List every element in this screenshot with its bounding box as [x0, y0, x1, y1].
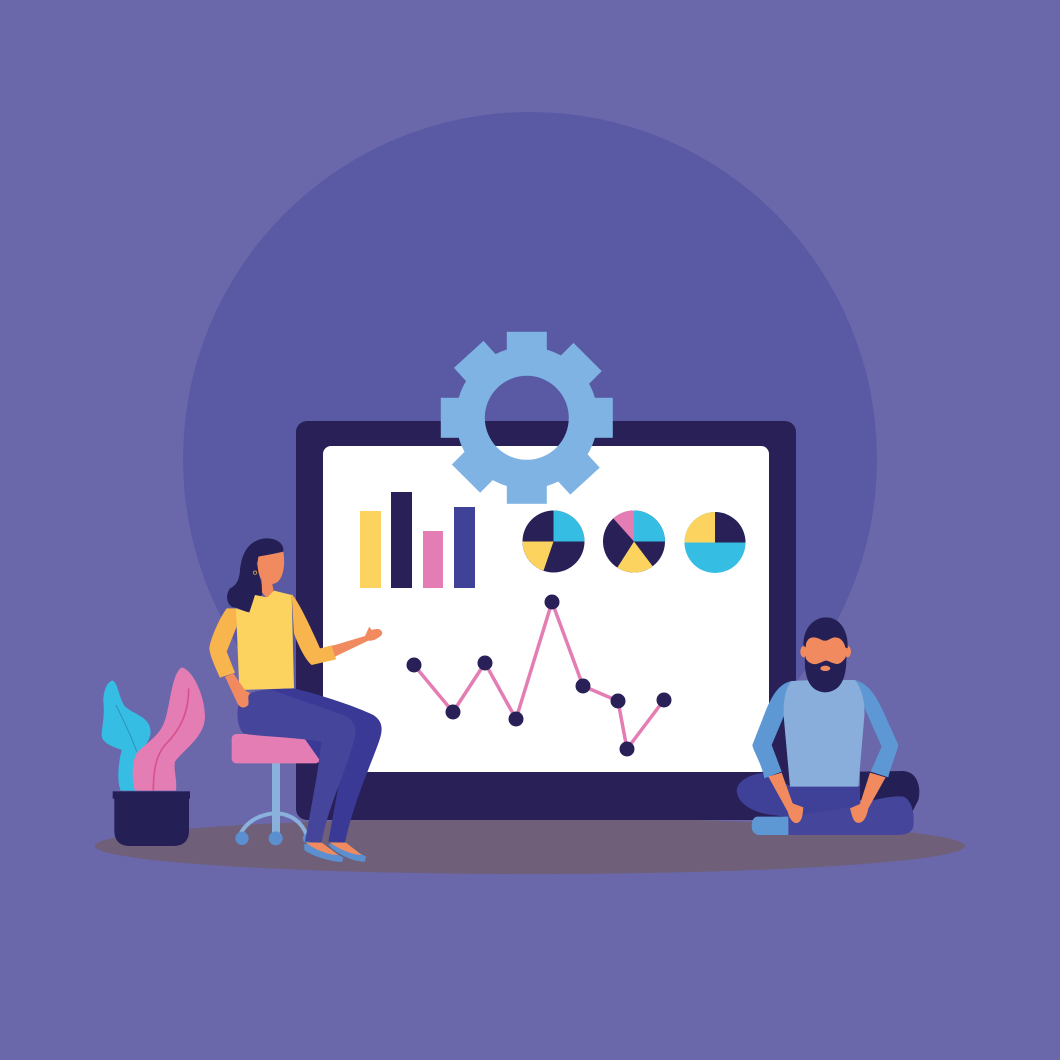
hair [803, 617, 848, 648]
far shoe [328, 843, 366, 862]
left ear [800, 646, 807, 657]
woman on stool [209, 538, 382, 862]
pie chart 3 [684, 512, 746, 573]
near shoe [304, 843, 343, 862]
beard [805, 657, 846, 692]
ground shadow [95, 818, 965, 874]
bar chart [360, 492, 475, 588]
foot [752, 817, 788, 835]
pointing arm [332, 627, 382, 657]
right ear [844, 646, 851, 657]
torso [784, 680, 864, 787]
hair [227, 538, 283, 612]
far arm [209, 608, 237, 678]
stool [232, 734, 320, 845]
icon: gear [441, 332, 613, 504]
right forearm [850, 773, 886, 823]
background circle [183, 112, 877, 806]
left forearm [768, 773, 803, 823]
pie chart 1 [522, 510, 584, 572]
pie chart 2 [603, 510, 665, 572]
hand on hip [225, 673, 251, 707]
near sleeve [292, 594, 336, 665]
face [806, 632, 845, 673]
mouth [820, 666, 830, 671]
sleeves [752, 681, 792, 778]
laptop frame [296, 421, 796, 820]
back leg [860, 771, 919, 817]
left leg [737, 773, 860, 822]
earring [253, 571, 257, 574]
icon: potted plant [102, 667, 205, 846]
far leg [270, 688, 382, 843]
laptop screen [323, 446, 769, 772]
right leg [788, 796, 914, 835]
blouse [236, 591, 294, 690]
near leg [237, 689, 356, 843]
line chart [406, 594, 672, 756]
face [258, 552, 284, 599]
man sitting cross-legged [737, 617, 919, 835]
